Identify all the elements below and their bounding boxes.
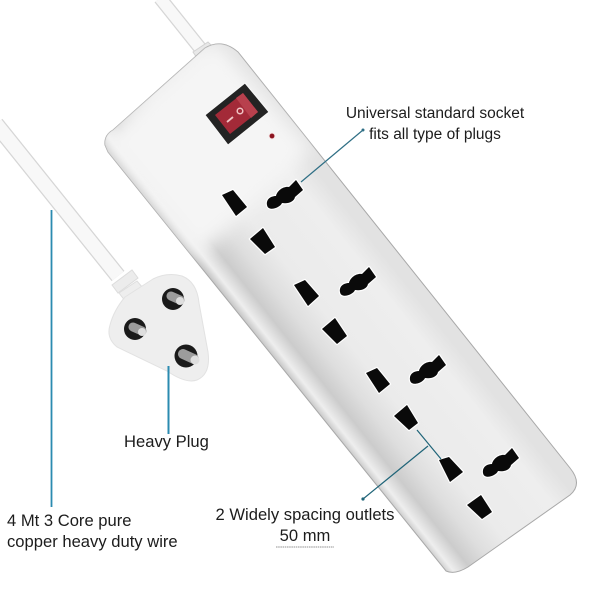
label: wire [7,511,178,551]
socket 1 [222,180,303,254]
socket 2 [294,267,376,344]
callout line: outlet spacing [362,430,441,500]
plug cord [0,124,143,302]
dimension underline [276,546,334,548]
label: outlet spacing [216,505,394,545]
indicator light [269,133,275,139]
label: wire: 4 Mt 3 Core pure [7,511,132,530]
rocker switch [205,83,269,145]
socket 3 [366,355,446,430]
label: outlet spacing: 2 Widely spacing outlets [216,505,394,524]
label: universal socket: Universal standard socket [346,105,524,122]
label: wire: copper heavy duty wire [7,532,178,551]
power strip body [100,40,576,572]
label: universal socket: fits all type of plugs [369,126,501,143]
label: universal socket [346,105,524,143]
pin left [124,318,146,340]
power cord: strip [160,0,213,58]
plug [109,275,209,381]
callout line: wire [50,210,52,507]
pin top [162,288,184,310]
callout line: universal socket [301,128,364,182]
label: heavy plug: Heavy Plug [124,432,209,451]
label: outlet spacing: 50 mm [280,526,330,545]
socket 4 [439,448,519,519]
pin bottom [174,344,200,368]
callout line: heavy plug [168,366,170,434]
